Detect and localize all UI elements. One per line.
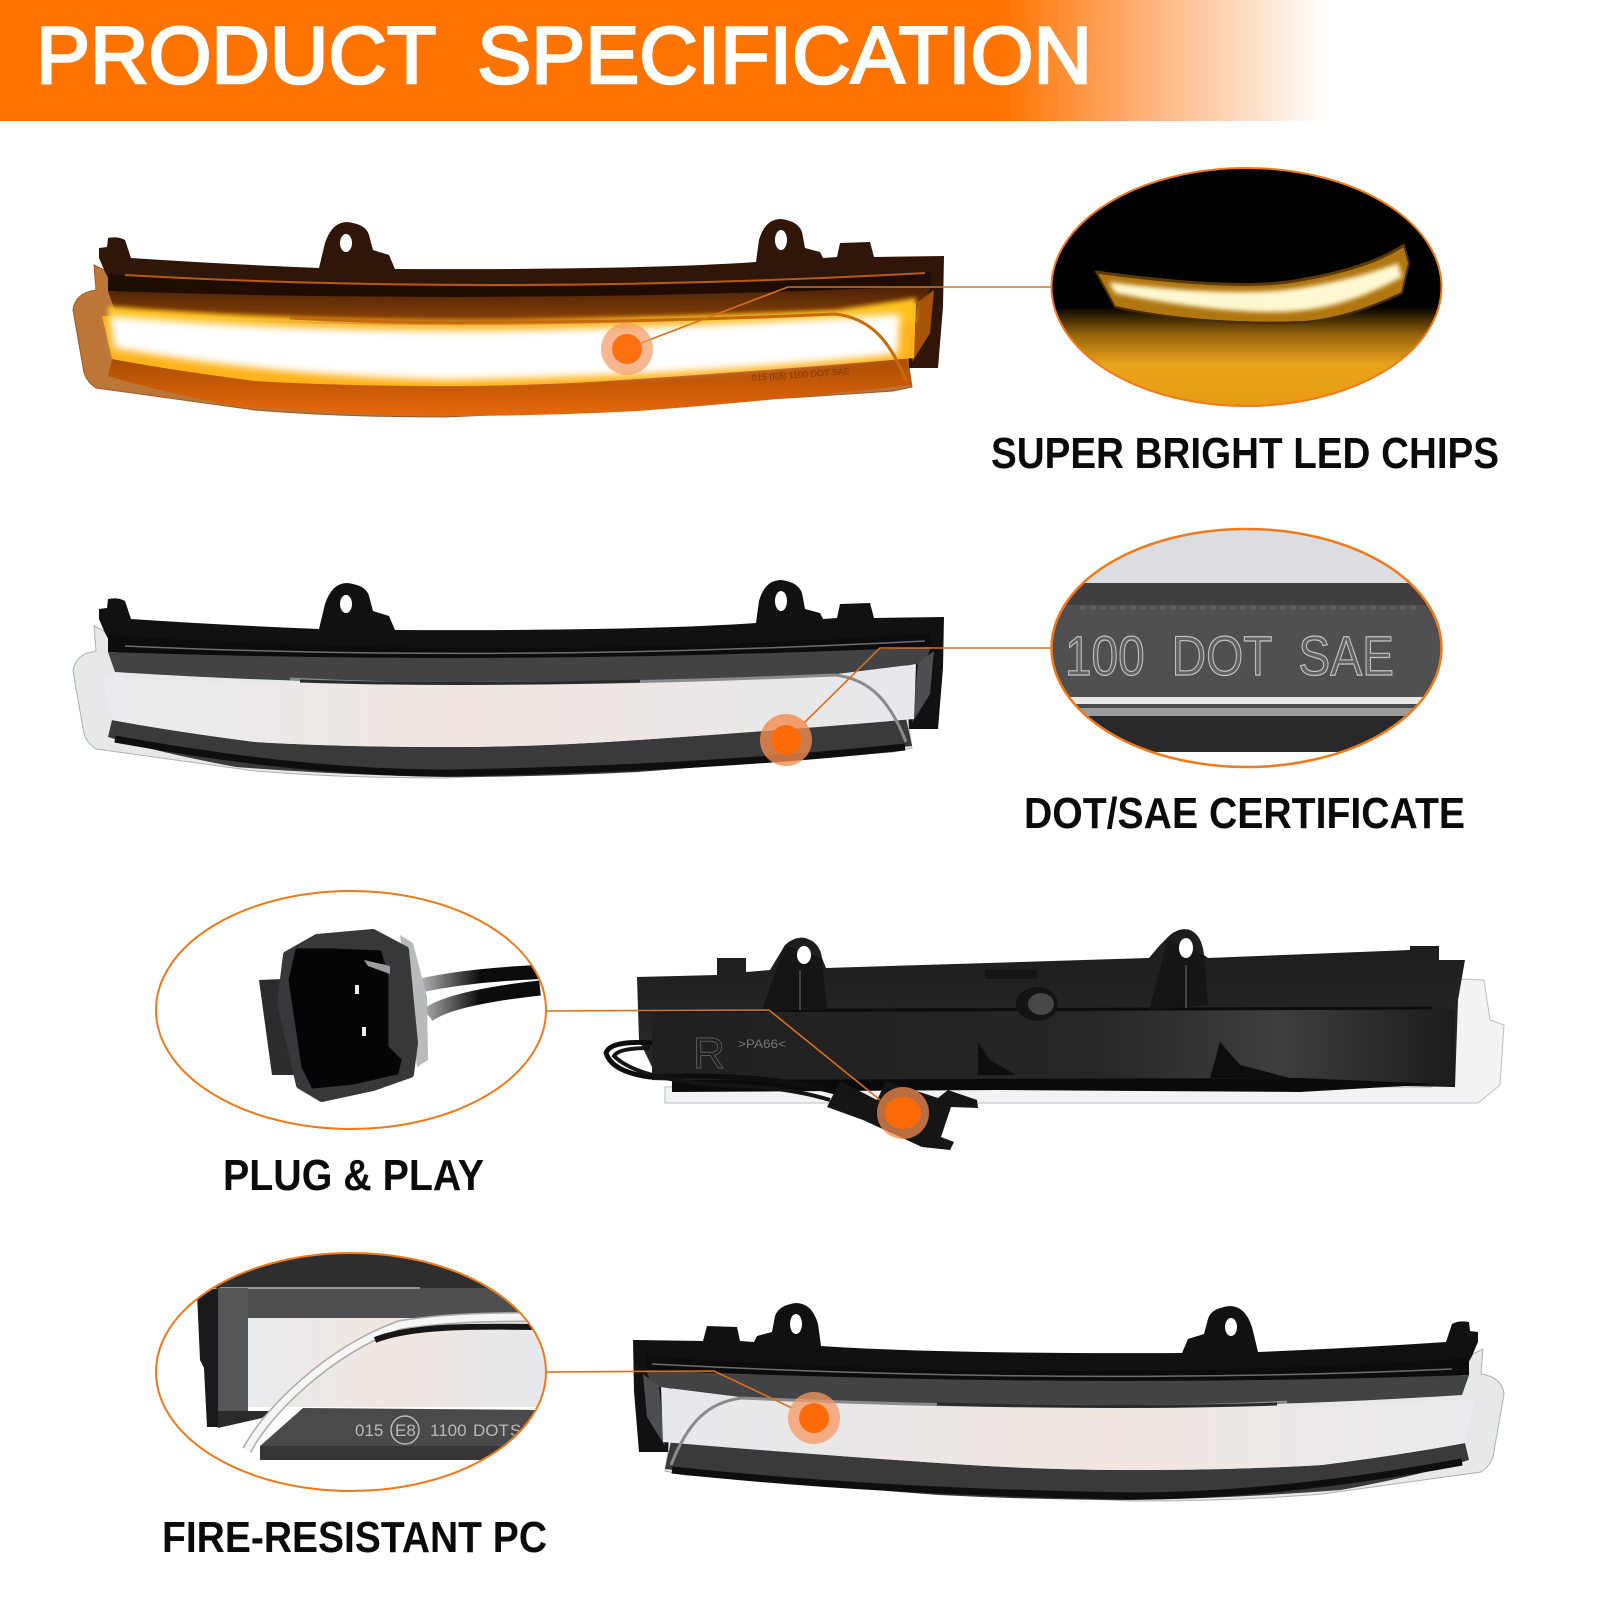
leader line 2 — [804, 648, 1053, 723]
wire harness — [606, 1042, 835, 1092]
title: PRODUCT SPECIFICATION — [36, 11, 1092, 101]
marker 4 — [788, 1392, 840, 1444]
connector — [827, 1081, 978, 1150]
callout: fire-resistant PC — [150, 1250, 550, 1562]
lamp 4: unlit, mirrored view — [633, 1303, 1504, 1501]
header banner — [0, 0, 1330, 121]
clear lens edge — [665, 978, 1504, 1103]
label: FIRE-RESISTANT PC — [162, 1513, 547, 1562]
callout: DOT/SAE certificate — [1024, 527, 1465, 838]
marker 2 — [760, 714, 812, 766]
embossed marking: E8 — [395, 1421, 416, 1440]
housing: >PA66< — [738, 1037, 786, 1051]
label: SUPER BRIGHT LED CHIPS — [991, 429, 1499, 478]
embossed marking: SAE — [510, 1421, 544, 1440]
connector pins — [355, 985, 359, 994]
callout: plug and play — [150, 888, 550, 1200]
embossed marking: 015 — [355, 1421, 383, 1440]
lamp 1: amber lit mirror indicator — [73, 219, 944, 417]
embossed marking: 1100 — [430, 1421, 467, 1440]
marker 1 — [601, 323, 653, 375]
leader line 3 — [546, 1010, 880, 1100]
leader line 1 — [641, 287, 1053, 343]
embossed marking: DOT — [473, 1421, 509, 1440]
label: DOT/SAE CERTIFICATE — [1024, 789, 1465, 838]
leader line 4 — [546, 1371, 792, 1408]
embossed marking: 100 DOT SAE — [1065, 624, 1394, 687]
housing — [637, 929, 1465, 1092]
label: PLUG & PLAY — [223, 1151, 484, 1200]
callout: super bright LED chips — [991, 166, 1499, 478]
marker 3 — [877, 1087, 929, 1139]
lamp 2: unlit mirror indicator — [73, 580, 944, 778]
lamp 1: amber lit mirror indicator: 015 (E8) 1100 DOT SAE — [751, 366, 850, 383]
housing: R — [693, 1029, 725, 1078]
lamp 3: rear view with wiring — [606, 929, 1504, 1150]
